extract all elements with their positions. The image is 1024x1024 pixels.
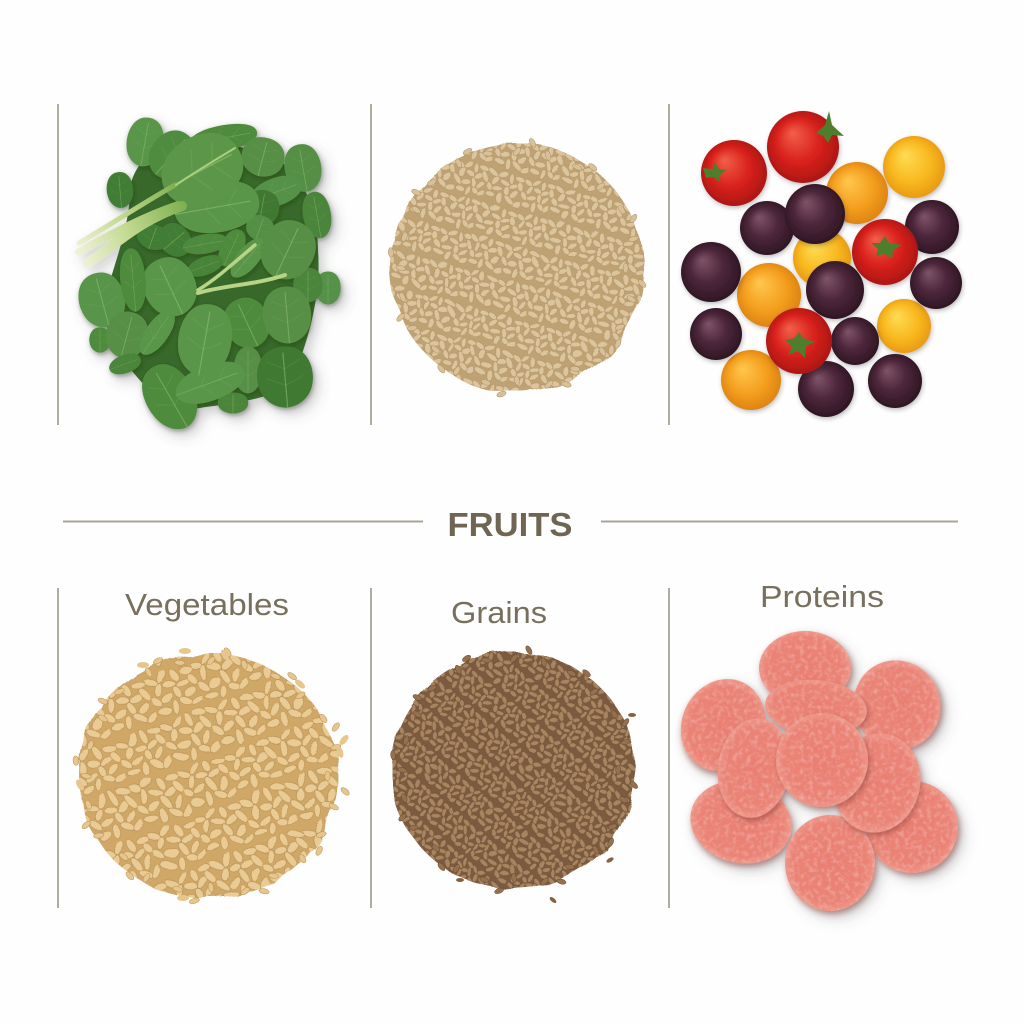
leaf stems — [79, 148, 285, 293]
section rule: left — [63, 520, 423, 522]
panel: golden grain pile — [73, 647, 351, 905]
label: Proteins: Proteins — [760, 579, 884, 614]
panel: spinach leaves — [73, 115, 341, 439]
panel: brown grain pile — [390, 645, 639, 904]
tomato stems — [703, 111, 902, 358]
heading: FRUITS: FRUITS — [448, 506, 572, 543]
panel: whole grain pile (light) — [388, 137, 647, 398]
panel: fruits — [681, 111, 962, 417]
yellow and orange fruits — [721, 136, 945, 410]
panel: protein slices — [666, 631, 958, 911]
label: Grains: Grains — [451, 595, 547, 630]
panel dividers: bottom row — [58, 588, 669, 908]
purple fruits — [681, 184, 962, 417]
panel dividers: top row — [58, 104, 669, 425]
red tomatoes — [701, 111, 918, 374]
label: Vegetables: Vegetables — [125, 587, 289, 622]
section rule: right — [601, 520, 958, 522]
